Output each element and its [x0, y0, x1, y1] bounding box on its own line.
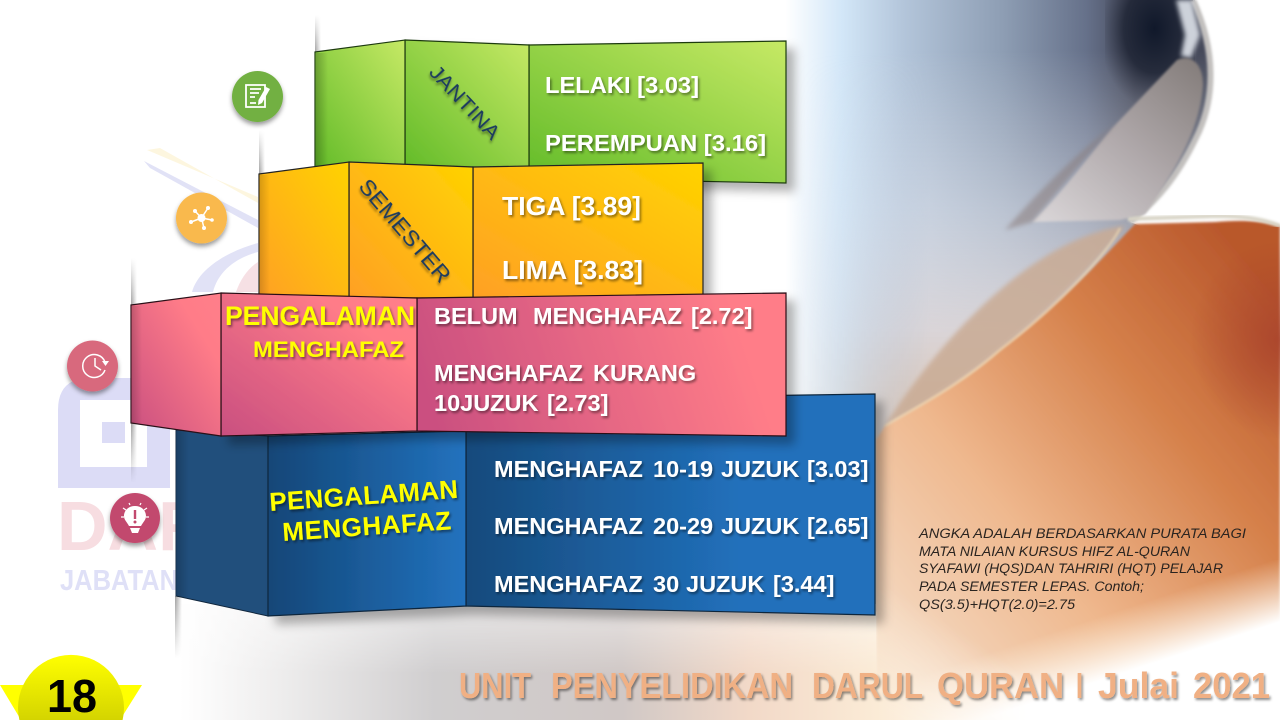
white fade — [870, 560, 1280, 720]
lower wash fade — [876, 622, 991, 720]
left edge shading — [260, 175, 270, 295]
labels: blue tier — [268, 474, 459, 547]
right and centre faces — [221, 293, 786, 436]
30 juzuk value: 30 — [653, 571, 679, 597]
kurang value: MENGHAFAZ — [434, 360, 583, 386]
values: blue tier — [494, 456, 868, 597]
right and centre faces — [349, 162, 703, 298]
panel: semester orange tier — [259, 162, 703, 298]
menghafaz label: MENGHAFAZ — [253, 337, 404, 362]
panel: pengalaman blue tier — [176, 394, 875, 616]
left edge shading — [132, 306, 142, 423]
10-19 juzuk value: MENGHAFAZ — [494, 456, 643, 482]
footer title: DARUL — [812, 665, 923, 706]
values: semester — [502, 191, 643, 285]
10-19 juzuk value: [3.03] — [807, 456, 868, 482]
icon: light bulb — [110, 493, 160, 543]
kurang value: KURANG — [593, 360, 696, 386]
left edge shading — [177, 431, 189, 597]
sphere outer rim — [1130, 0, 1211, 222]
logo JABATAN text: JABATAN — [60, 565, 178, 597]
orange crease line — [885, 228, 1120, 426]
note text: SYAFAWI (HQS)DAN TAHRIRI (HQT) PELAJAR — [919, 561, 1223, 576]
juzuk value: [2.73] — [547, 390, 608, 416]
label: jantina: JANTINA — [424, 61, 504, 145]
lower grey wash — [180, 604, 876, 720]
note text: QS(3.5)+HQT(2.0)=2.75 — [919, 597, 1076, 612]
30 juzuk value: JUZUK — [686, 571, 764, 597]
juzuk value: 10JUZUK — [434, 390, 539, 416]
left face — [259, 162, 349, 298]
icon: network nodes — [176, 192, 227, 244]
footer title: Julai — [1098, 665, 1179, 706]
sphere crescent — [1032, 58, 1203, 222]
footer title: 2021 — [1193, 665, 1270, 706]
logo DAR text: DAR — [57, 487, 209, 565]
left face — [131, 293, 221, 436]
20-29 juzuk value: 20-29 — [653, 513, 713, 539]
note text: PADA SEMESTER LEPAS. Contoh; — [919, 579, 1144, 594]
right and centre faces — [405, 40, 786, 183]
menghafaz label: MENGHAFAZ — [281, 505, 452, 547]
belum value: [2.72] — [691, 303, 752, 329]
watermark logo — [57, 148, 258, 597]
tiga value: TIGA [3.89] — [502, 191, 641, 221]
circle — [18, 655, 124, 720]
orange skin — [876, 221, 1280, 720]
10-19 juzuk value: 10-19 — [653, 456, 713, 482]
sphere highlight — [1176, 0, 1200, 58]
note text: MATA NILAIAN KURSUS HIFZ AL-QURAN — [919, 544, 1190, 559]
left face — [315, 40, 405, 170]
ribbon — [0, 685, 142, 720]
logo mark — [58, 378, 170, 488]
20-29 juzuk value: [2.65] — [807, 513, 868, 539]
10-19 juzuk value: JUZUK — [721, 456, 799, 482]
sphere — [786, 0, 1211, 612]
sphere brown seam — [1005, 123, 1117, 230]
20-29 juzuk value: MENGHAFAZ — [494, 513, 643, 539]
left face — [176, 430, 268, 616]
orange shoulder highlight — [1128, 216, 1280, 226]
lelaki value: LELAKI [3.03] — [545, 72, 699, 98]
belum value: MENGHAFAZ — [533, 303, 682, 329]
30 juzuk value: MENGHAFAZ — [494, 571, 643, 597]
sphere dark patch — [1105, 0, 1195, 130]
panel: jantina green tier — [315, 40, 786, 183]
footer title: UNIT — [459, 665, 531, 706]
icon: clock — [67, 340, 118, 392]
footer title: QURAN — [937, 665, 1064, 706]
pengalaman label: PENGALAMAN — [225, 301, 415, 331]
values: pink tier — [434, 303, 752, 416]
lower wash lightening — [180, 604, 876, 720]
edge shadows behind tiers — [131, 15, 321, 658]
label: semester: SEMESTER — [354, 174, 456, 288]
pengalaman label: PENGALAMAN — [268, 474, 459, 517]
left edge shading — [316, 53, 328, 168]
belum value: BELUM — [434, 303, 518, 329]
footer title: PENYELIDIKAN — [551, 665, 793, 706]
values: jantina — [545, 72, 766, 156]
logo swoosh — [144, 148, 258, 292]
page number badge — [0, 655, 142, 720]
20-29 juzuk value: JUZUK — [721, 513, 799, 539]
note text: ANGKA ADALAH BERDASARKAN PURATA BAGI — [918, 526, 1246, 541]
right and centre faces — [268, 394, 875, 616]
icon: document with pen — [232, 71, 283, 122]
panel: pengalaman pink tier — [131, 293, 786, 436]
footer title — [459, 665, 1270, 706]
perempuan value: PEREMPUAN [3.16] — [545, 130, 766, 156]
lima value: LIMA [3.83] — [502, 255, 643, 285]
neck band — [885, 226, 1125, 425]
30 juzuk value: [3.44] — [773, 571, 834, 597]
footer title: I — [1076, 665, 1083, 706]
labels: pink tier — [225, 301, 415, 362]
red patch — [1100, 240, 1280, 440]
note text — [918, 526, 1246, 612]
